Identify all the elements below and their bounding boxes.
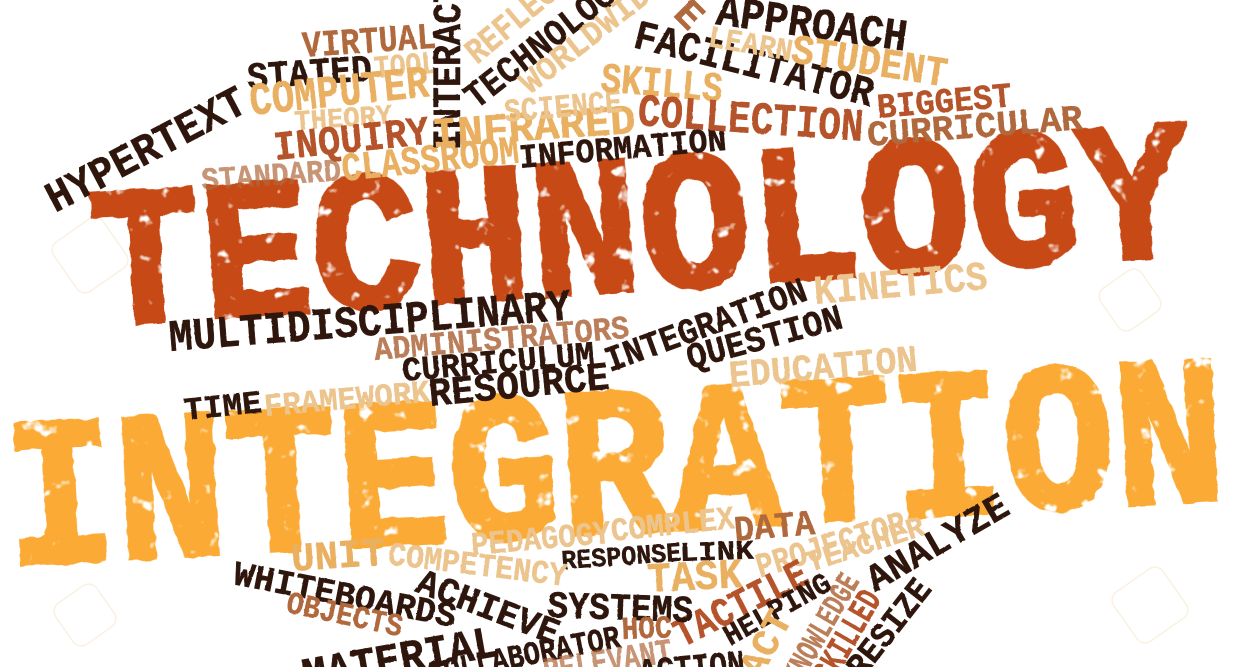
word: CURRICULUM: CURRICULUM	[401, 337, 596, 392]
word: BIGGEST: BIGGEST	[875, 77, 1013, 129]
word: FACILITATOR: FACILITATOR	[629, 13, 879, 119]
word: INFORMATION: INFORMATION	[518, 123, 728, 179]
word: EDUCATION: EDUCATION	[727, 340, 919, 399]
word: CURRICULAR: CURRICULAR	[866, 99, 1085, 157]
word: HOC: HOC	[621, 610, 672, 649]
word: STUDENT: STUDENT	[788, 27, 951, 99]
word: STANDARD: STANDARD	[200, 153, 342, 200]
word: STATED: STATED	[246, 49, 374, 101]
word: ANALYZE: ANALYZE	[860, 486, 1018, 602]
word: TACTILE: TACTILE	[667, 553, 817, 660]
word: DATA: DATA	[732, 504, 817, 552]
word: RESOURCE: RESOURCE	[427, 357, 611, 419]
word: LINK: LINK	[679, 537, 755, 570]
word: TEACHER: TEACHER	[803, 511, 929, 582]
word: ADMINISTRATORS: ADMINISTRATORS	[373, 311, 631, 370]
word: THEORY: THEORY	[293, 101, 394, 139]
word: COLLECTION: COLLECTION	[636, 87, 865, 155]
word: OBJECTS: OBJECTS	[283, 586, 406, 646]
word: CLASSROOM: CLASSROOM	[340, 131, 521, 194]
word: PROJECTOR: PROJECTOR	[752, 505, 911, 589]
word: UNIT: UNIT	[290, 533, 387, 584]
word: HYPERTEXT: HYPERTEXT	[38, 79, 256, 225]
word: KINETICS: KINETICS	[812, 256, 989, 317]
word: TOOL: TOOL	[373, 46, 439, 88]
word: SCIENCE: SCIENCE	[503, 85, 623, 132]
word: SYSTEMS: SYSTEMS	[547, 586, 694, 634]
word: PEDAGOGY: PEDAGOGY	[470, 516, 613, 565]
word: INQUIRY: INQUIRY	[272, 111, 432, 173]
word: TIME: TIME	[182, 385, 264, 430]
word: SKILLS: SKILLS	[599, 56, 725, 115]
word: INFRARED: INFRARED	[431, 98, 637, 160]
word: COMPUTER: COMPUTER	[247, 58, 432, 129]
watermarks	[48, 213, 1192, 650]
word: QUESTION: QUESTION	[682, 299, 847, 380]
word: ACHIEVE: ACHIEVE	[410, 563, 565, 656]
word: TASK: TASK	[646, 552, 744, 605]
word: HELPING: HELPING	[718, 568, 838, 655]
word: COMPETENCY: COMPETENCY	[386, 537, 569, 596]
word: WHITEBOARDS: WHITEBOARDS	[230, 556, 459, 638]
word: LEARN: LEARN	[705, 21, 795, 71]
word: VIRTUAL: VIRTUAL	[301, 18, 438, 69]
word: COMPLEX: COMPLEX	[609, 501, 737, 551]
word: MULTIDISCIPLINARY: MULTIDISCIPLINARY	[167, 282, 573, 365]
word: FRAMEWORK: FRAMEWORK	[263, 375, 432, 426]
word: INTEGRATION: INTEGRATION	[600, 271, 813, 382]
word: RESPONSE: RESPONSE	[561, 540, 682, 578]
